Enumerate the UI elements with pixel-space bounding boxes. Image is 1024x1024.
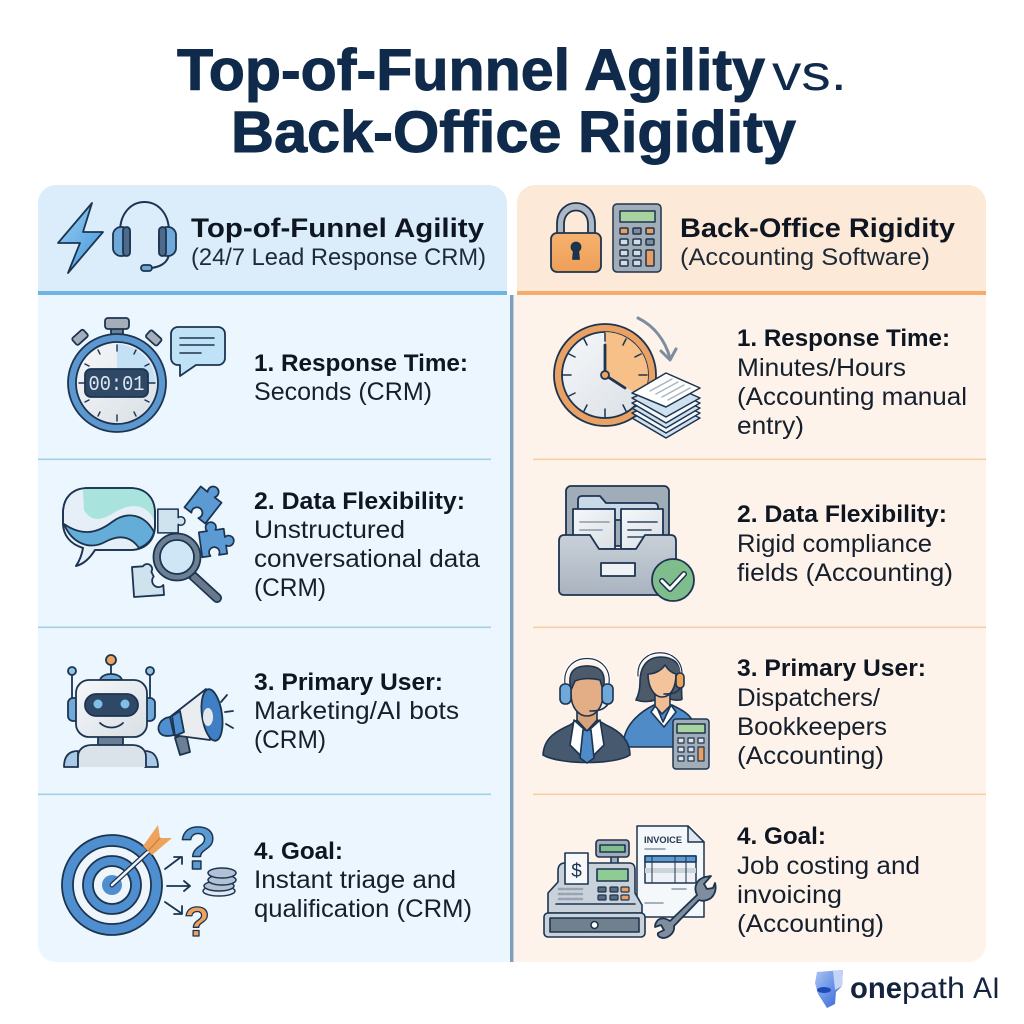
icon: question marks and coins: ? [180, 815, 216, 882]
icon: male dispatcher [543, 658, 630, 763]
header text: back-office rigidity: (Accounting Software) [680, 244, 930, 271]
text: primary user: Bookkeepers [737, 713, 887, 741]
icon: padlock [551, 203, 601, 272]
icon: stopwatch [68, 318, 166, 432]
text: primary user: Marketing/AI bots [254, 697, 459, 725]
icon: stopwatch: 00:01 [88, 374, 144, 397]
title: Back-Office Rigidity [231, 100, 796, 165]
text: goal [737, 823, 920, 938]
header text: back-office rigidity: Back-Office Rigidity [680, 213, 955, 243]
text: primary user: (CRM) [254, 726, 326, 754]
text: goal [254, 838, 472, 923]
header text: top-of-funnel agility: (24/7 Lead Response CRM) [191, 244, 486, 271]
header text: top-of-funnel agility: Top-of-Funnel Agility [191, 213, 484, 243]
icon: headset [113, 202, 176, 271]
icon: paper stack [632, 373, 700, 438]
text: response time: 1. Response Time: [254, 350, 468, 377]
icon: small calculator [673, 719, 709, 769]
title: Top-of-Funnel Agility [177, 38, 765, 103]
text: goal: Instant triage and [254, 866, 456, 894]
text: primary user: (Accounting) [737, 742, 884, 770]
panel: back-office rigidity [514, 185, 986, 962]
header text: back-office rigidity [680, 213, 955, 271]
title: vs. [772, 45, 847, 101]
text: data flexibility: Unstructured [254, 516, 405, 544]
icon: cash register [544, 840, 645, 937]
icon: lightning bolt [58, 203, 103, 273]
text: goal: qualification (CRM) [254, 895, 472, 923]
text: primary user: Dispatchers/ [737, 684, 880, 712]
icon: megaphone [158, 688, 233, 755]
text: response time: Minutes/Hours [737, 354, 906, 382]
text: primary user: 3. Primary User: [737, 655, 926, 682]
text: response time: Seconds (CRM) [254, 378, 432, 406]
logo: onepath AI: AI [973, 972, 1000, 1005]
icon: waiting arrow [638, 318, 676, 360]
icon: question marks and coins: ? [184, 898, 210, 945]
text: data flexibility [254, 488, 480, 602]
icon: robot [64, 655, 158, 767]
text: response time: entry) [737, 412, 804, 440]
icon: calculator [613, 204, 661, 272]
icon: invoice document: INVOICE [644, 835, 682, 846]
text: primary user [254, 669, 459, 754]
panel: top-of-funnel agility [38, 185, 510, 962]
text: response time: (Accounting manual [737, 383, 967, 411]
icon: clock [554, 324, 656, 426]
text: response time: 1. Response Time: [737, 325, 950, 352]
text: response time [737, 325, 967, 440]
icon: cash register: $ [571, 861, 582, 882]
icon: conversation bubble and puzzle [63, 480, 236, 598]
icon: female bookkeeper [623, 653, 693, 747]
text: data flexibility: 2. Data Flexibility: [737, 501, 947, 528]
text: goal: (Accounting) [737, 910, 884, 938]
text: data flexibility: (CRM) [254, 574, 326, 602]
logo: onepath AI: one [850, 972, 902, 1005]
icon: file drawer [559, 486, 676, 595]
logo: onepath AI: path [902, 972, 965, 1005]
text: data flexibility: 2. Data Flexibility: [254, 488, 465, 515]
text: goal: invoicing [737, 881, 842, 909]
text: data flexibility: conversational data [254, 545, 480, 573]
text: goal: 4. Goal: [737, 823, 826, 850]
icon: chat bubble [171, 327, 225, 376]
icon: invoice document [637, 826, 704, 917]
icon: question marks and coins [180, 815, 236, 945]
icon: target and arrow [62, 825, 172, 935]
icon: triage arrows [165, 857, 190, 914]
icon: wrench [655, 876, 716, 938]
text: primary user [737, 655, 926, 770]
icon: logo mask [815, 970, 843, 1008]
text: data flexibility: fields (Accounting) [737, 559, 953, 587]
icon: green check badge [652, 559, 694, 601]
text: data flexibility: Rigid compliance [737, 530, 932, 558]
text: data flexibility [737, 501, 953, 587]
text: response time [254, 350, 468, 406]
text: goal: Job costing and [737, 852, 920, 880]
title [177, 38, 847, 165]
center divider [510, 295, 514, 962]
text: primary user: 3. Primary User: [254, 669, 443, 696]
text: goal: 4. Goal: [254, 838, 343, 865]
header text: top-of-funnel agility [191, 213, 486, 271]
logo: onepath AI [815, 970, 1000, 1008]
